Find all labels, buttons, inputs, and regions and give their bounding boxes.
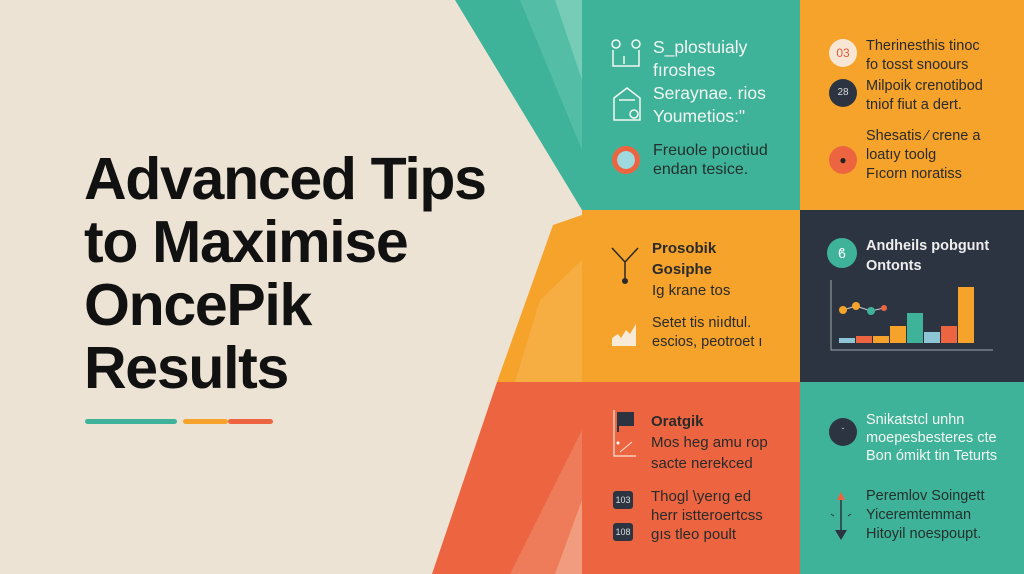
text: tip 6: gıs tleo poult	[651, 526, 736, 543]
panel: dark chart	[800, 210, 1024, 382]
text: tip 7	[866, 412, 997, 464]
text: tip 4: escios, peotroet ı	[652, 334, 762, 350]
text: tip b: tniof fiut a dert.	[866, 97, 962, 113]
icon: teal circle	[827, 238, 857, 268]
text: tip 2	[653, 142, 768, 178]
icon: teal circle: ϐ	[838, 245, 846, 261]
icon: badge red: ●	[839, 153, 847, 167]
heading: chart: Andheils pobgunt	[866, 238, 989, 254]
heading: chart: Ontonts	[866, 258, 922, 274]
text: tip 3: Gosiphe	[652, 261, 712, 278]
text: tip 7: Snikatstcl unhn	[866, 412, 964, 428]
text: tip 7: moepesbesteres cte	[866, 430, 997, 446]
panel: orange top	[800, 0, 1024, 210]
text: tip 8: Hitoyil noespoupt.	[866, 526, 981, 542]
text: tip 1	[653, 37, 766, 126]
text: tip a: fo tosst snoours	[866, 57, 968, 73]
title: to Maximise	[84, 209, 407, 275]
text: tip 4: Setet tis niıdtul.	[652, 315, 751, 331]
text: tip c: Fıcorn noratiss	[866, 166, 962, 182]
icon: badges 103: 108	[615, 527, 631, 537]
text: tip 4	[652, 315, 762, 350]
text: tip c	[866, 128, 980, 182]
icon: dark circle	[829, 418, 857, 446]
icon: fork	[612, 248, 638, 284]
text: tip 1: Youmetios:"	[653, 106, 745, 126]
text: tip 5: sacte nerekced	[651, 455, 753, 472]
text: tip 2: endan tesice.	[653, 161, 748, 178]
text: tip 3: Ig krane tos	[652, 282, 730, 299]
text: tip 6: Thogl \yerıg ed	[651, 488, 751, 505]
title	[84, 146, 486, 401]
text: tip 3: Prosobik	[652, 240, 716, 257]
text: tip 8: Yiceremtemman	[866, 507, 971, 523]
panel: teal bottom	[800, 382, 1024, 574]
icon: network	[611, 39, 641, 67]
text: tip 5	[651, 413, 768, 472]
text: tip 6	[651, 488, 763, 543]
text: tip 7: Bon ómikt tin Teturts	[866, 448, 997, 464]
panel: red bottom	[582, 382, 800, 574]
text: tip 1: S_plostuialy	[653, 37, 747, 57]
text: tip c: Shesatis ⁄ crene a	[866, 128, 980, 144]
bar chart	[830, 280, 993, 350]
icon: badge 03	[829, 39, 857, 67]
heading: chart	[866, 238, 990, 274]
icon: house	[613, 87, 641, 121]
icon: badge 28: 28	[837, 87, 849, 98]
text: tip a	[866, 38, 980, 73]
text: tip 5: Oratgik	[651, 413, 704, 430]
text: tip 2: Freuole poıctiud	[653, 142, 768, 159]
text: tip 8	[866, 488, 984, 542]
text: tip 8: Peremlov Soingett	[866, 488, 984, 504]
underline bars	[85, 419, 273, 424]
title: Advanced Tips	[84, 146, 486, 212]
title: OncePik	[84, 272, 311, 338]
icon: dark circle: ˇ	[842, 427, 844, 436]
panel: orange middle	[582, 210, 800, 382]
text: tip b	[866, 78, 983, 113]
icon: arrow vertical	[830, 492, 852, 540]
text: tip 1: Seraynae. rios	[653, 83, 766, 103]
icon: badge 28	[829, 79, 857, 107]
icon: flag chart	[613, 410, 636, 457]
text: tip a: Therinesthis tinoc	[866, 38, 980, 54]
text: tip 6: herr istteroertcss	[651, 507, 763, 524]
text: tip 5: Mos heg amu rop	[651, 434, 768, 451]
icon: chart mountains	[612, 324, 636, 346]
icon: circle	[612, 146, 640, 174]
icon: badge 03: 03	[836, 46, 850, 60]
text: tip 3	[652, 240, 730, 299]
icon: badges 103	[613, 491, 633, 541]
title: Results	[84, 335, 288, 401]
icon: badges 103: 103	[615, 495, 631, 505]
text: tip b: Milpoik crenotibod	[866, 78, 983, 94]
panel: teal top	[582, 0, 800, 210]
text: tip c: loatıy toolg	[866, 147, 936, 163]
icon: badge red	[829, 146, 857, 174]
text: tip 1: fıroshes	[653, 60, 715, 80]
